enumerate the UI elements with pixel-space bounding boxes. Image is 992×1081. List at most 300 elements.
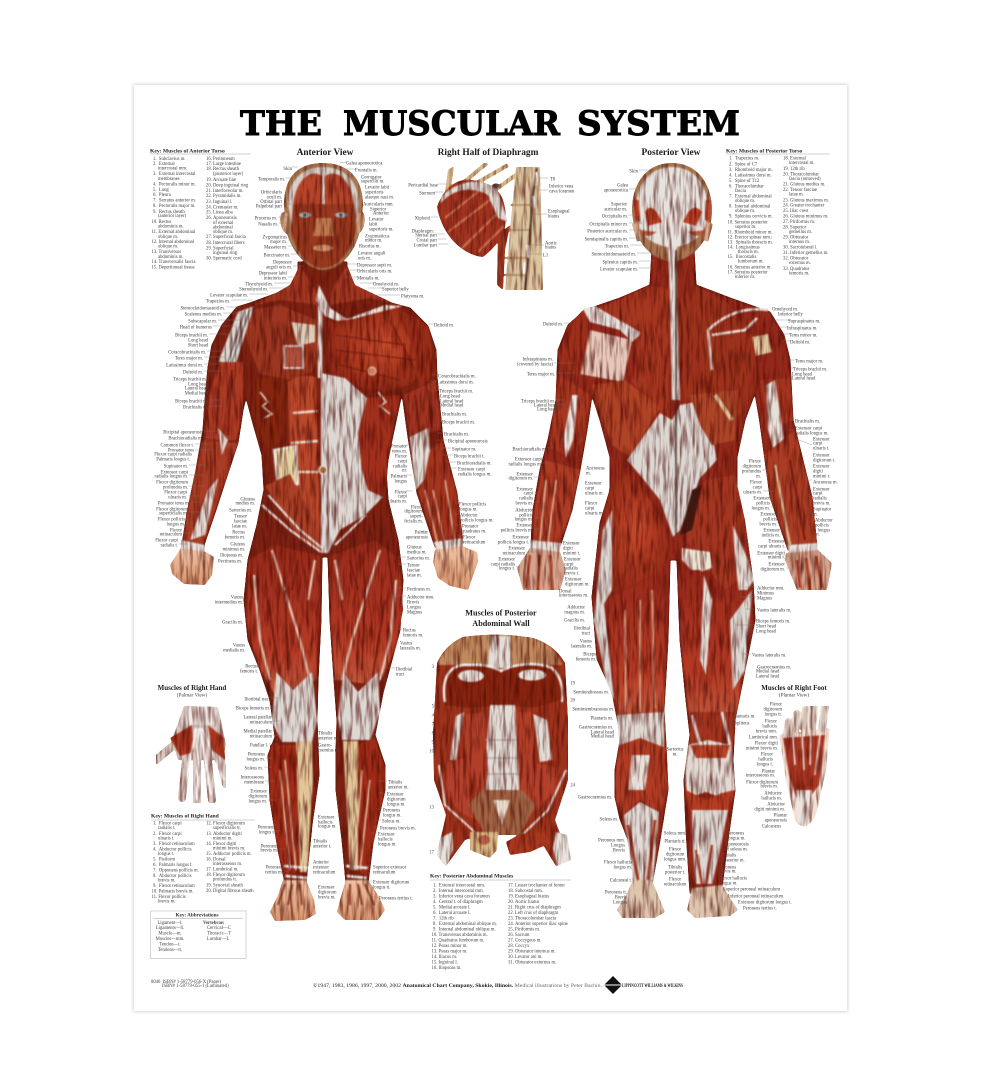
key list: 3. Flexor retinaculum	[153, 842, 195, 847]
diaphragm labels left: Xiphoid	[415, 216, 431, 222]
key list: 6. Lateral arcuate l.	[433, 911, 470, 916]
lumbar spine	[483, 705, 522, 790]
key list: 5. Medial arcuate l.	[433, 906, 470, 910]
posterior left-hand labels: carpi	[585, 506, 595, 512]
anterior forearm inner labels: Flexor	[395, 454, 407, 460]
key list: superior m.	[735, 225, 756, 230]
anterior left labels: Flexor digitorum	[156, 480, 188, 486]
anterior right labels: labii	[369, 222, 378, 228]
key list: brevis m.	[158, 900, 175, 904]
posterior head labels: Extensor	[508, 546, 525, 552]
key list: 8. Pectoralis major m.	[153, 204, 195, 209]
anterior right leg labels: Tensor	[407, 564, 420, 568]
hypothenar muscles	[208, 725, 225, 760]
posterior left-hand labels: Extensor	[563, 542, 580, 546]
anterior left labels: Common flexor t.	[161, 444, 194, 448]
abdominal callout numbers	[429, 665, 576, 856]
key list: 1. Subclavius m.	[153, 157, 185, 162]
posterior right inner forearm labels: Extensor	[760, 512, 777, 518]
posterior centre labels: m.	[673, 752, 677, 758]
key list: minimi m.	[213, 836, 233, 842]
left calf	[270, 745, 298, 880]
key list: 5. Pisiform	[153, 858, 175, 862]
anterior right labels: Long head	[440, 394, 461, 400]
key list: 25. Piriformis m.	[508, 928, 540, 932]
key list: 8. External abdominal oblique m.	[433, 922, 497, 927]
anterior right labels: oris m.	[358, 256, 371, 262]
posterior left-hand labels: brevis t.	[564, 572, 579, 576]
key list: oblique m.	[735, 199, 755, 204]
posterior head labels: longus t.	[499, 566, 515, 572]
posterior right thigh labels: of soleus m.	[725, 848, 748, 852]
foot labels	[746, 702, 787, 830]
posterior head labels: aponeurotica	[604, 188, 629, 194]
right arm tendon	[766, 380, 785, 455]
anterior right labels: longus m.	[459, 508, 478, 512]
anterior leg labels centre: Tibialis	[313, 840, 327, 844]
posterior centre labels	[664, 748, 687, 888]
thenar muscles	[170, 725, 194, 756]
abdominal window	[274, 446, 298, 484]
anterior leg labels left: Peroneus	[258, 826, 275, 830]
left gastrocnemius	[615, 738, 668, 815]
left psoas	[464, 712, 488, 830]
left hamstrings	[606, 570, 665, 716]
posterior right inner forearm labels: carpi	[753, 486, 763, 490]
posterior right thigh labels: Peroneus	[719, 866, 736, 870]
anterior right labels: Triceps brachii m.	[439, 390, 473, 394]
key list: 27. Coccygeus m.	[508, 938, 542, 944]
anterior right leg labels: latae m.	[407, 574, 422, 578]
abdominal callout numbers: 5	[432, 704, 435, 710]
anterior right labels: Depressor septi m.	[357, 264, 392, 268]
abdominal callout numbers: 9	[432, 740, 435, 746]
posterior left-hand labels: interosseous m.	[559, 594, 588, 598]
posterior right inner forearm labels: Flexor	[749, 460, 761, 464]
posterior leg left labels: Semimembranosus m.	[572, 708, 614, 712]
key list: 10. Transversus abdominis m.	[432, 933, 488, 938]
key list: 6. Pleura	[153, 193, 172, 198]
posterior head labels	[491, 170, 639, 572]
posterior left-hand labels: minimi t.	[563, 552, 580, 556]
diaphragm labels left: Sternum	[419, 192, 435, 196]
key list: of external	[213, 221, 234, 226]
toes halo	[787, 706, 825, 735]
key: anterior torso	[150, 148, 251, 270]
key: right hand	[151, 814, 255, 904]
left gluteus	[600, 473, 670, 600]
posterior right inner forearm labels: profundus	[742, 470, 761, 474]
posterior head labels: Splenius capitis m.	[602, 260, 638, 266]
anterior right leg labels: retinaculum	[373, 870, 396, 876]
abbreviations left: Muscles—mm.	[156, 937, 184, 942]
anterior forearm inner labels	[388, 444, 428, 540]
anterior leg labels centre: longus m.	[318, 824, 336, 830]
posterior upper right labels: t longus	[815, 528, 830, 534]
anterior leg labels left: Biceps femoris m.	[236, 706, 270, 712]
anterior right leg labels: Adductor mm.	[407, 596, 434, 600]
foot tendons	[278, 884, 374, 905]
posterior leg left labels: Brevis	[613, 848, 625, 854]
abdominal callout numbers: 4	[432, 714, 435, 718]
shoulder tendons	[218, 306, 254, 363]
posterior head labels: Extensor	[516, 524, 533, 528]
posterior right thigh labels: Inferior peroneal retinaculum	[728, 894, 784, 900]
anterior leg labels centre: brevis m.	[318, 896, 335, 900]
posterior head labels: pollicis	[519, 514, 533, 518]
dome patches	[458, 670, 484, 682]
diaphragm labels right: cava foramen	[549, 190, 575, 194]
key list: 17. Lesser trochanter of femur	[508, 884, 565, 888]
foot labels: brevis mm.	[756, 730, 777, 734]
anterior right leg labels: medius m.	[407, 550, 427, 556]
key list	[152, 822, 254, 904]
key list: 20. Digital fibrous sheath	[206, 889, 254, 894]
abdominal callout numbers: 19	[570, 682, 576, 686]
hand inset	[156, 706, 226, 803]
posterior leg left labels: Gastrocnemius m.	[578, 796, 612, 800]
anterior right labels: Frontalis m.	[355, 168, 378, 174]
hand heading: Muscles of Right Hand	[158, 684, 226, 692]
central tendon rim	[441, 182, 508, 222]
right wrist band	[434, 538, 463, 550]
posterior head labels: radialis longus m.	[509, 462, 542, 468]
key list: 10. Serratus posterior	[728, 220, 768, 226]
posterior right thigh labels: Short head	[756, 624, 777, 630]
right back muscles	[680, 285, 755, 430]
posterior upper right labels: Omohyoid m.	[772, 308, 798, 312]
posterior leg left labels: Soleus m.	[600, 818, 618, 822]
key list: 21. Right crus of diaphragm	[508, 906, 561, 910]
right lower back fan	[690, 390, 737, 445]
nipple	[368, 367, 376, 375]
right gastrocnemius	[685, 740, 735, 798]
left oblique	[250, 378, 285, 450]
key list: abdominal	[213, 226, 233, 230]
key list: 8. Internal abdominal	[729, 204, 771, 210]
diaphragm crus	[497, 225, 510, 290]
heading: posterior view: Posterior View	[642, 148, 701, 158]
key list: oblique m.	[158, 244, 178, 250]
key list: 14. Flexor digiti	[206, 842, 237, 847]
anterior right leg labels: Superior extensor	[373, 866, 407, 870]
key list: abdominis m.	[158, 224, 184, 230]
posterior right inner forearm labels: brevis m.	[760, 522, 777, 528]
poster sheet	[133, 84, 848, 1012]
anterior hip labels: Vastus	[231, 596, 243, 600]
title: SYSTEM	[577, 104, 740, 144]
key list: 7. 12th rib	[433, 916, 454, 922]
posterior left-hand labels: digiti	[563, 546, 574, 552]
anterior right labels: Biceps brachii m.	[442, 420, 475, 426]
left upper arm	[206, 362, 243, 440]
posterior right thigh labels: longus m.	[727, 836, 746, 842]
right knee	[338, 672, 380, 740]
right calf	[357, 738, 385, 878]
pectoral fibres	[335, 320, 415, 380]
posterior leg left labels: Longus	[613, 900, 627, 906]
anterior left labels: Supinator m.	[164, 464, 188, 470]
torso outline	[433, 635, 570, 866]
anterior hip labels: Rectus	[232, 530, 245, 536]
anterior right leg labels: Rectus	[403, 628, 416, 634]
anterior left labels: Brachioradialis m.	[168, 436, 203, 442]
anterior leg labels left: retinaculum	[250, 734, 272, 740]
posterior leg left labels: Gastrocnemius m.	[579, 726, 613, 730]
key list: 25. Linea alba	[206, 210, 234, 216]
left trapezius	[600, 285, 670, 420]
anterior leg labels centre: cnemius m.	[318, 748, 340, 754]
key list: inguinal ring	[213, 251, 238, 256]
anterior left labels: Sternocleidomastoid m.	[180, 306, 225, 312]
anterior leg labels centre: retinaculum	[313, 870, 336, 876]
key list: radialis t.	[158, 826, 175, 831]
anterior leg labels left: Soleus m.	[244, 766, 263, 772]
posterior leg left labels: Adductor	[567, 606, 585, 610]
posterior leg left labels: Peroneus tt.	[605, 890, 627, 896]
posterior head labels: longus m.	[514, 518, 533, 522]
anterior right labels: Biceps brachii t.	[454, 454, 485, 460]
key list: 3. Inferior vena cava foramen	[433, 894, 490, 900]
anterior right labels: Supinator m.	[452, 448, 476, 452]
posterior left-hand labels: ulnaris m.	[585, 492, 604, 496]
anterior right leg labels: Extensor	[387, 792, 404, 798]
posterior leg left labels: Iliotibial	[574, 626, 591, 632]
foot labels: Plantar	[774, 814, 787, 818]
key list: 15. Inguinal l.	[432, 960, 458, 966]
anterior right labels: retinaculum	[463, 540, 486, 546]
anterior right labels: Corrugator	[361, 176, 382, 180]
abbreviations left: Tendons—tt.	[158, 948, 182, 953]
neck spine	[668, 245, 680, 400]
anterior left labels: Nasalis m.	[258, 222, 278, 228]
anterior left labels: Pronator teres	[168, 448, 194, 454]
key list: (anterior layer)	[158, 214, 187, 219]
right foot	[337, 880, 385, 920]
key list: longus t.	[158, 852, 174, 857]
anterior forearm inner labels: Flexor	[395, 490, 407, 496]
posterior upper right labels: minimi t.	[813, 474, 830, 480]
key list: 18. Subcostal mm.	[508, 889, 543, 894]
anterior right labels	[346, 162, 493, 546]
key list: 12. Flexor digitorum	[206, 822, 245, 826]
anterior forearm inner labels: Palmaris	[391, 474, 407, 480]
key list: 24. Cremaster m.	[206, 206, 238, 210]
foot outline	[779, 728, 830, 826]
right forearm tendon	[410, 428, 430, 490]
posterior upper right labels: Extensor	[813, 464, 830, 470]
head	[280, 163, 365, 270]
right scapular lines	[708, 309, 768, 370]
anterior left labels: Head of humerus	[180, 326, 212, 330]
posterior head labels: Long head	[537, 408, 558, 412]
anterior right labels: Deltoid m.	[434, 324, 454, 328]
posterior upper right labels: pollicis	[815, 524, 829, 528]
anterior left labels: Brachialis m.	[183, 406, 208, 410]
key list: 6. Thoracolumbar	[729, 184, 764, 190]
ribs	[458, 163, 520, 190]
posterior upper right labels: carpi	[813, 442, 823, 446]
key list: 10. Palmaris brevis m.	[152, 890, 194, 894]
anterior right labels: Omohyoid m.	[373, 282, 399, 288]
foot labels: Lumbrical mm.	[749, 736, 778, 740]
abbreviations right: Thoracic—T	[207, 932, 231, 936]
foot inset	[779, 706, 830, 826]
lower pelvis left	[470, 832, 498, 858]
anterior right labels: pollicis longus m.	[460, 518, 493, 524]
posterior head labels: auricular m.	[604, 208, 627, 212]
key list: 9. Flexor retinaculum	[153, 884, 195, 889]
anterior right labels: Medial head	[440, 404, 464, 408]
abbreviations left	[156, 921, 184, 953]
left forearm tendons	[190, 428, 228, 540]
key list: latae m.	[789, 192, 804, 198]
key list: 20. Aortic hiatus	[508, 900, 540, 905]
anterior forearm inner labels: Pronator	[391, 444, 407, 450]
anterior right labels: Levator	[369, 218, 384, 222]
infraspinatus fascia	[580, 330, 632, 382]
anterior hip labels: Gluteus	[240, 498, 255, 502]
anterior left labels: Buccinator m.	[263, 254, 290, 258]
anterior leg labels left: Interosseous	[241, 776, 264, 780]
anterior left labels: Medial head	[185, 392, 209, 396]
abdominal callout numbers: 7	[432, 722, 435, 728]
key list: 1. Flexor carpi	[153, 822, 182, 826]
sternum	[318, 305, 322, 378]
anterior left labels: Biceps brachii m.	[175, 400, 208, 404]
anterior right leg labels: Gluteus	[407, 546, 422, 550]
anterior left labels: Long head	[188, 382, 209, 388]
anterior left labels: ulnaris m.	[168, 496, 187, 500]
key list: 2. External	[153, 162, 175, 167]
key list: 21. Interfoveolar m.	[206, 189, 244, 194]
key list: 13. Spinalis thoracis m.	[728, 240, 773, 246]
anterior right labels: Brachioradialis m.	[457, 462, 492, 466]
anterior left labels: Flexor	[170, 528, 182, 534]
heel	[796, 790, 812, 826]
anterior leg labels left: Peroneus	[248, 752, 265, 758]
posterior head labels: Superior	[611, 202, 627, 208]
anterior hip labels: Tensor	[234, 514, 247, 520]
key heading: Key: Muscles of Right Hand	[151, 814, 220, 820]
anterior left labels: Pronator teres m.	[158, 502, 190, 506]
posterior right thigh labels: Extensor digitorum longus t.	[738, 900, 792, 906]
posterior upper right labels: Anconeus m.	[813, 480, 838, 486]
posterior head labels: Trapezius m.	[605, 244, 629, 250]
anterior right leg labels: Sartorius m.	[407, 556, 430, 562]
posterior head labels: brevis m.	[516, 502, 533, 506]
posterior right thigh labels: Long head	[756, 630, 777, 634]
key list: 24. Anterior superior iliac spine	[508, 922, 568, 927]
anterior hip labels: medius m.	[235, 502, 255, 506]
key: abbreviations	[150, 911, 246, 958]
anterior leg labels centre	[313, 732, 340, 900]
key list: 26. Aponeurosis	[206, 216, 237, 221]
posterior head labels: carpi radialis	[491, 562, 515, 568]
posterior centre labels: posterior t.	[665, 870, 685, 876]
key list: 13. Transversus	[152, 250, 181, 255]
posterior right inner forearm labels: ulnaris m.	[743, 490, 762, 496]
posterior left-hand labels: Extensor	[564, 558, 581, 562]
anterior forearm inner labels: ficialis m.	[404, 520, 423, 524]
anterior right leg labels: Peroneus tertius t.	[379, 896, 413, 902]
collar tendon	[316, 285, 402, 326]
diaphragm labels left: Lumbar part	[414, 244, 438, 248]
foot labels: minimi brevis m.	[746, 746, 778, 752]
key list: inferior m.	[735, 275, 755, 280]
posterior head labels: Extensor	[512, 536, 529, 540]
anterior left labels: Short head	[188, 344, 209, 348]
abdominal callout numbers: 20	[570, 698, 576, 704]
anterior right leg labels: Peroneus	[383, 808, 400, 814]
anterior left labels: Extensor carpi	[161, 470, 189, 476]
posterior figure	[517, 163, 832, 918]
posterior upper right labels: Extensor	[813, 488, 830, 492]
anterior leg labels centre: hallucis	[318, 820, 333, 826]
anterior right labels: Anterior	[373, 212, 389, 216]
anterior left labels: Deltoid m.	[183, 370, 203, 376]
body silhouette	[182, 262, 463, 883]
anterior hip labels: femoris t.	[240, 670, 258, 674]
anterior right labels: alaeque nasi m.	[365, 196, 394, 200]
posterior upper right labels: Brachialis m.	[795, 420, 820, 424]
anterior right labels: Orbicularis oris m.	[357, 270, 392, 274]
foot heading: Muscles of Right Foot	[761, 684, 827, 692]
anterior leg labels left: Patellar l.	[250, 744, 268, 748]
key heading: Key: Muscles of Posterior Torso	[726, 148, 803, 154]
anterior leg labels left: Iliotibial tract	[244, 698, 271, 702]
anterior right leg labels: Tibialis	[388, 780, 402, 786]
anterior forearm inner labels: carpi	[398, 494, 408, 500]
key list: 33. Quadratus	[783, 267, 809, 272]
anterior hip labels: medialis m.	[223, 648, 245, 654]
key list: 12. Erector spinae mm.:	[728, 236, 772, 240]
anterior left labels: Long head	[188, 338, 209, 344]
left knee	[617, 712, 664, 750]
leader lines	[179, 162, 815, 897]
anterior leg labels centre: Tibialis	[318, 732, 332, 736]
anterior forearm inner labels: teres m.	[392, 450, 407, 454]
left foot	[270, 880, 316, 921]
anterior left labels: Levator scapulae m.	[210, 294, 248, 298]
posterior left-hand labels: Extensor	[565, 578, 582, 582]
key list: 16. Serratus anterior m.	[728, 266, 772, 270]
anterior right labels: Superior belly	[382, 288, 409, 292]
shin bones	[296, 741, 313, 872]
anterior left labels: Biceps brachii m.	[175, 334, 208, 338]
posterior left-hand labels	[559, 466, 605, 598]
anterior hip labels: Iliopsoas m.	[220, 554, 243, 558]
abdominal callout numbers: 17	[429, 850, 435, 856]
anterior left labels: Depressor	[273, 260, 292, 266]
posterior right thigh labels: Minimus	[757, 592, 774, 596]
key list: 16. Peritoneum	[206, 157, 235, 162]
posterior right thigh labels: Tibialis	[722, 854, 736, 858]
key heading: Key: Muscles of Anterior Torso	[150, 148, 225, 154]
posterior right inner forearm labels: digitorum m.	[761, 568, 785, 572]
right hand	[785, 550, 832, 590]
calf tendons	[280, 760, 370, 870]
anterior left labels: superficialis m.	[159, 512, 188, 516]
anterior leg labels centre: Extensor	[318, 886, 335, 890]
posterior right inner forearm labels: Extensor	[768, 540, 785, 544]
anterior forearm inner labels: superi-	[410, 514, 423, 520]
posterior upper right labels: Teres minor m.	[789, 334, 817, 338]
lower abdomen	[265, 474, 322, 553]
hand subheading: (Palmar View)	[177, 692, 207, 698]
key list: 4. Pectoralis minor m.	[153, 182, 196, 188]
posterior right thigh labels: Gastrocnemius m.	[757, 666, 791, 670]
